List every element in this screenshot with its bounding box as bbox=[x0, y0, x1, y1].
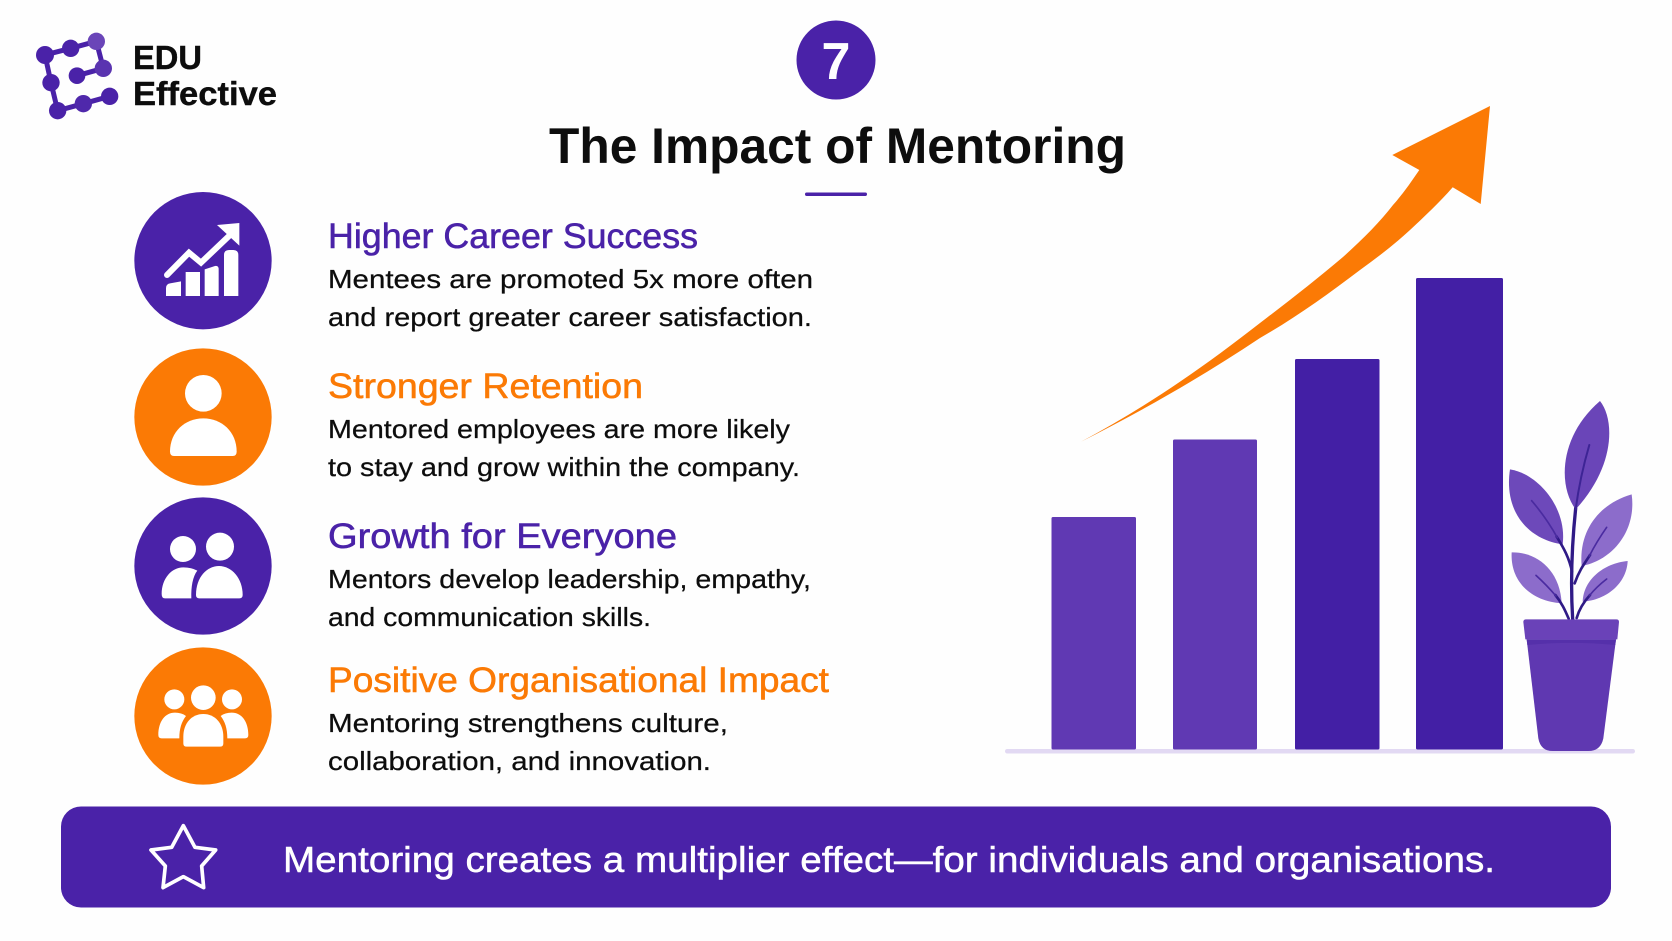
icon: star bbox=[151, 826, 216, 888]
banner text: Mentoring creates a multiplier effect—for individuals and organisations. bbox=[283, 839, 1495, 880]
description: collaboration, and innovation. bbox=[328, 746, 711, 776]
callout banner bbox=[61, 806, 1611, 908]
number badge: 7 bbox=[822, 33, 850, 91]
icon: person bbox=[134, 348, 272, 486]
description: Mentored employees are more likely bbox=[328, 414, 790, 444]
icon: group of three bbox=[134, 647, 272, 785]
title: The Impact of Mentoring bbox=[549, 118, 1126, 174]
heading: Positive Organisational Impact bbox=[328, 661, 829, 700]
item: Growth for Everyone bbox=[134, 497, 811, 635]
logo wordmark: Effective bbox=[133, 75, 277, 112]
description: and communication skills. bbox=[328, 602, 651, 632]
description: Mentors develop leadership, empathy, bbox=[328, 564, 811, 594]
description: and report greater career satisfaction. bbox=[328, 302, 812, 332]
item: Higher Career Success bbox=[134, 192, 813, 332]
logo wordmark: EDU bbox=[133, 39, 202, 76]
description: to stay and grow within the company. bbox=[328, 452, 800, 482]
arrow: rising trend bbox=[1081, 106, 1490, 442]
number badge bbox=[796, 20, 876, 100]
item: Stronger Retention bbox=[134, 348, 800, 486]
bar chart bbox=[1005, 278, 1635, 754]
description: Mentoring strengthens culture, bbox=[328, 708, 728, 738]
icon: growth chart bbox=[134, 192, 272, 329]
logo: EDU Effective bbox=[36, 33, 277, 119]
icon: potted plant bbox=[1509, 401, 1632, 751]
description: Mentees are promoted 5x more often bbox=[328, 264, 813, 294]
heading: Stronger Retention bbox=[328, 367, 643, 406]
item: Positive Organisational Impact bbox=[134, 647, 829, 785]
heading: Higher Career Success bbox=[328, 217, 698, 256]
heading: Growth for Everyone bbox=[328, 517, 677, 556]
icon: logo network bbox=[36, 33, 118, 119]
icon: two people bbox=[134, 497, 272, 635]
